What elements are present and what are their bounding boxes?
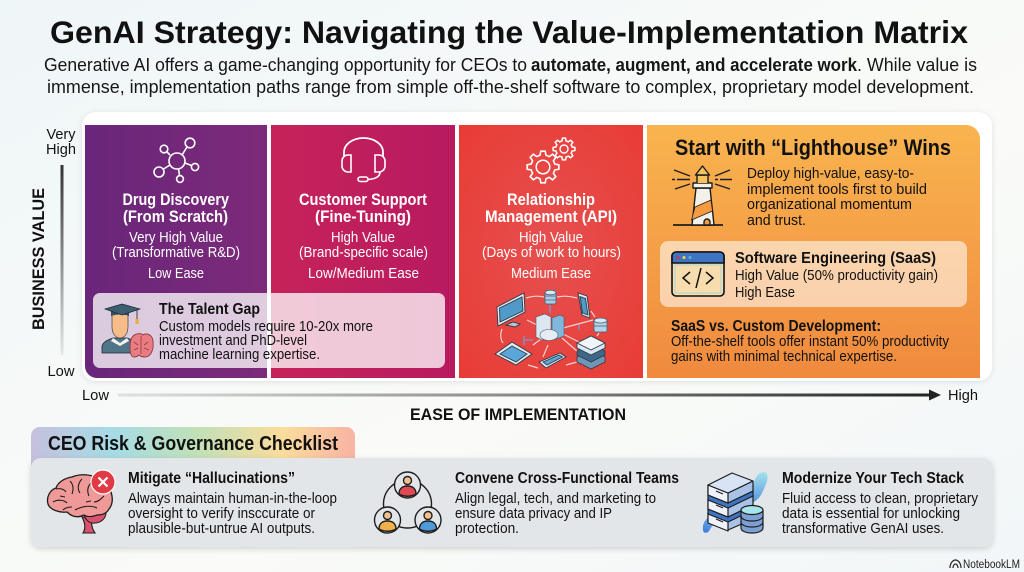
icon: graduate with brain	[102, 304, 153, 357]
text: tech stack description: transformative GenAI uses.	[782, 520, 944, 537]
details: relationship management: (Days of work to hours)	[482, 244, 621, 261]
details: customer support	[299, 229, 428, 282]
panel: customer support	[271, 125, 455, 378]
details: customer support: (Brand-specific scale)	[299, 244, 428, 261]
callout: software engineering: High Value (50% productivity gain)	[735, 267, 938, 284]
text: lighthouse description	[747, 165, 927, 229]
panel: lighthouse wins	[647, 125, 980, 378]
title: GenAI Strategy: Navigating the Value-Implementation Matrix	[50, 14, 968, 50]
text: teams description: protection.	[455, 520, 519, 537]
text: teams description: Align legal, tech, and marketing to	[455, 490, 656, 507]
server stack	[577, 336, 605, 369]
server hub	[536, 314, 564, 340]
icon: servers and data flow	[703, 472, 768, 533]
icon: brain with warning	[47, 470, 115, 533]
details: customer support: Low/Medium Ease	[308, 265, 419, 282]
y axis: business value	[29, 126, 76, 380]
details: customer support: High Value	[331, 229, 395, 246]
text: tech stack description: Fluid access to clean, proprietary	[782, 490, 978, 507]
icon: molecule network	[154, 138, 199, 182]
icon: code window	[672, 252, 724, 296]
text: SaaS vs custom: Off-the-shelf tools offer instant 50% productivity	[671, 334, 950, 350]
subtitle: immense, implementation paths range from simple off-the-shelf software to complex, proprietary model development.	[47, 76, 974, 97]
heading tab: CEO checklist	[31, 427, 355, 466]
text: hallucinations description: oversight to verify insccurate or	[128, 505, 315, 522]
phone	[578, 293, 590, 318]
text: SaaS vs custom: gains with minimal technical expertise.	[671, 349, 897, 365]
details: drug discovery: Very High Value	[129, 229, 223, 246]
text: teams description	[455, 490, 656, 537]
heading: customer support	[299, 191, 427, 226]
details: drug discovery: Low Ease	[148, 265, 204, 282]
heading: drug discovery: (From Scratch)	[123, 208, 228, 226]
panel: checklist: Mitigate “Hallucinations”	[128, 470, 295, 487]
database top	[545, 290, 556, 304]
heading: customer support: (Fine-Tuning)	[315, 208, 411, 226]
panel: checklist	[31, 458, 993, 547]
callout: the talent gap: The Talent Gap	[159, 301, 260, 318]
matrix card background	[82, 112, 992, 381]
monitor	[497, 293, 525, 327]
y axis: business value: BUSINESS VALUE	[29, 188, 48, 330]
text: talent gap description	[159, 319, 373, 363]
details: relationship management: Medium Ease	[511, 265, 591, 282]
text: tech stack description: data is essential for unlocking	[782, 505, 960, 522]
y axis: business value: Low	[48, 363, 75, 380]
details: relationship management	[482, 229, 621, 282]
subtitle: automate, augment, and accelerate work	[531, 54, 858, 75]
x axis: ease of implementation	[82, 387, 978, 424]
icon: gears	[527, 138, 575, 183]
text: lighthouse description: Deploy high-value, easy-to-	[747, 165, 914, 182]
icon: lighthouse	[672, 166, 732, 225]
y axis: business value: Very	[46, 126, 76, 143]
database right	[594, 318, 607, 332]
text: hallucinations description	[128, 490, 337, 537]
heading: lighthouse wins: Start with “Lighthouse” Wins	[675, 135, 951, 160]
text: teams description: ensure data privacy and IP	[455, 505, 612, 522]
tablet	[495, 342, 532, 365]
heading tab: CEO checklist: CEO Risk & Governance Checklist	[48, 433, 338, 455]
illustration: connected devices network	[495, 290, 607, 369]
heading: relationship management	[485, 191, 617, 226]
text: hallucinations description: plausible-but-untrue AI outputs.	[128, 520, 315, 537]
details: relationship management: High Value	[519, 229, 583, 246]
smartphone	[539, 353, 566, 368]
text: talent gap description: Custom models require 10-20x more	[159, 319, 373, 335]
panel: drug discovery	[85, 125, 267, 378]
heading: drug discovery: Drug Discovery	[122, 191, 230, 209]
subtitle: Generative AI offers a game-changing opportunity for CEOs to	[44, 54, 527, 75]
x axis: ease of implementation: Low	[82, 387, 109, 404]
text: tech stack description	[782, 490, 978, 537]
x axis: ease of implementation: High	[948, 387, 978, 404]
callout: software engineering: Software Engineering (SaaS)	[735, 250, 936, 267]
text: lighthouse description: and trust.	[747, 212, 806, 229]
text: lighthouse description: organizational momentum	[747, 196, 912, 213]
icon: cross-functional team	[374, 472, 441, 533]
text: SaaS vs custom	[671, 318, 950, 365]
text: talent gap description: machine learning expertise.	[159, 347, 320, 363]
heading: drug discovery	[122, 191, 230, 226]
text: SaaS vs custom: SaaS vs. Custom Development:	[671, 318, 881, 335]
icon: headset	[342, 138, 385, 182]
details: drug discovery: (Transformative R&D)	[112, 244, 240, 261]
subtitle: . While value is	[857, 54, 977, 75]
subtitle	[44, 54, 977, 97]
y axis: business value: High	[46, 141, 76, 158]
x axis: ease of implementation: EASE OF IMPLEMENTATION	[410, 405, 626, 424]
text: lighthouse description: implement tools first to build	[747, 181, 927, 198]
heading: relationship management: Management (API)	[485, 208, 617, 226]
callout: software engineering	[660, 241, 967, 307]
details: drug discovery	[112, 229, 240, 282]
text: talent gap description: investment and PhD-level	[159, 333, 307, 349]
panel: relationship management	[459, 125, 643, 378]
heading: relationship management: Relationship	[507, 191, 595, 209]
panel: checklist: Modernize Your Tech Stack	[782, 470, 964, 487]
heading: customer support: Customer Support	[299, 191, 427, 209]
callout: the talent gap	[93, 293, 445, 368]
text: hallucinations description: Always maintain human-in-the-loop	[128, 490, 337, 507]
panel: checklist: Convene Cross-Functional Teams	[455, 470, 679, 487]
callout: software engineering: High Ease	[735, 284, 795, 301]
